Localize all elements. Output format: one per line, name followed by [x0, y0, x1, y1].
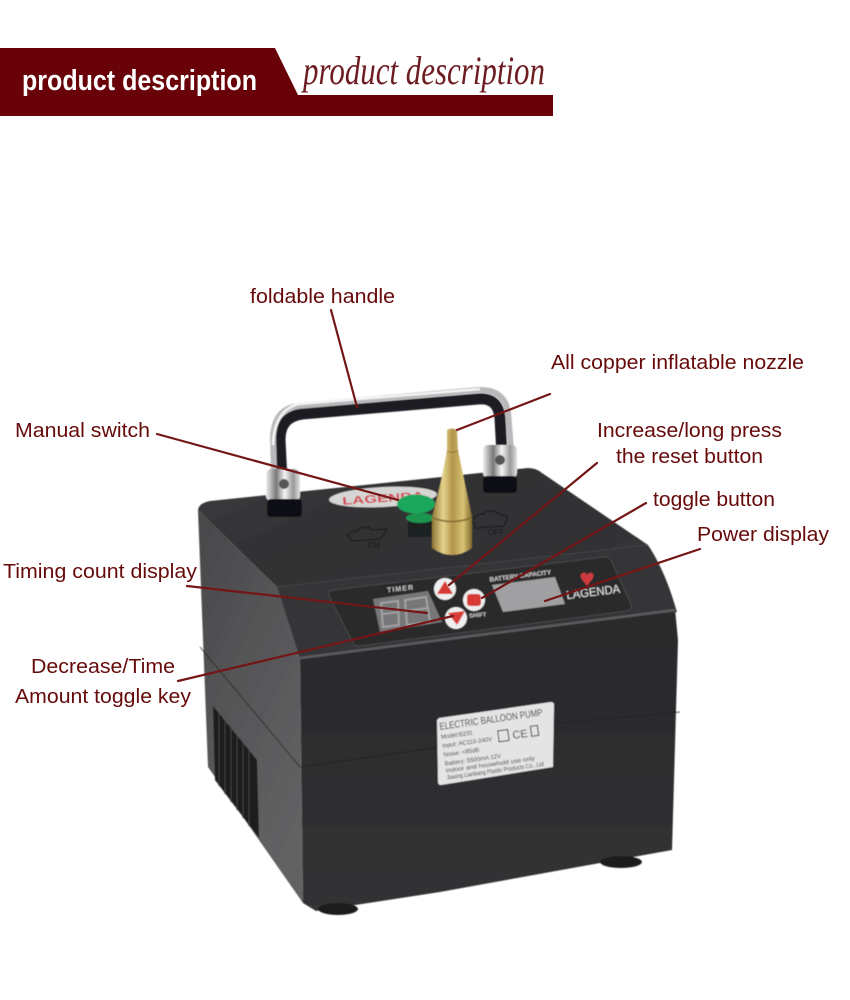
foldable handle	[273, 389, 511, 480]
logo heart	[581, 573, 593, 586]
label: timing count display: Timing count display	[3, 560, 198, 583]
banner heading: product description	[22, 65, 257, 97]
feet	[318, 856, 642, 915]
toggle button	[463, 589, 485, 611]
left hinge	[266, 469, 302, 517]
sticker title: ELECTRIC BALLOON PUMP	[439, 708, 544, 733]
label: increase/reset	[597, 419, 782, 468]
slanted control face	[277, 545, 677, 658]
top face	[198, 468, 648, 587]
header banner	[0, 48, 553, 116]
panel plate	[329, 557, 632, 646]
sticker specs: Noise: <85dB	[443, 748, 480, 759]
off battery icon: OFF	[488, 528, 504, 537]
label: decrease/time amount toggle: Decrease/Time	[31, 655, 175, 678]
label: foldable handle: foldable handle	[250, 285, 395, 308]
banner shape	[0, 48, 553, 116]
timer caption: TIMER	[387, 585, 413, 594]
product photo: balloon pump	[198, 389, 680, 915]
top badge	[329, 484, 437, 510]
battery display	[492, 577, 565, 612]
label: decrease/time amount toggle	[15, 655, 192, 708]
certification marks: CE	[512, 728, 529, 742]
body seams	[200, 647, 680, 767]
sticker specs: Jiaxing Lianbang Plastic Products Co., Ltd	[446, 762, 544, 781]
top badge: LAGENDA	[342, 490, 425, 508]
logo wordmark: LAGENDA	[566, 582, 621, 602]
product sticker	[437, 702, 554, 785]
label: increase/reset: the reset button	[616, 445, 763, 468]
front face	[300, 609, 678, 911]
on battery icon: ON	[368, 541, 380, 550]
label: decrease/time amount toggle: Amount toggle key	[15, 685, 192, 708]
sticker specs: Input: AC110-240V	[442, 737, 493, 750]
front top edge highlight	[300, 610, 675, 658]
right hinge	[483, 445, 517, 493]
callout lines	[157, 310, 700, 681]
label: toggle button: toggle button	[653, 488, 775, 511]
script heading: product description	[301, 48, 545, 93]
side vent	[213, 706, 259, 838]
brass nozzle	[432, 428, 472, 555]
label: increase/reset: Increase/long press	[597, 419, 782, 442]
shift caption: SHIFT	[469, 612, 487, 620]
label: nozzle: All copper inflatable nozzle	[551, 351, 804, 374]
label: power display: Power display	[697, 523, 830, 546]
green manual switch	[397, 494, 435, 537]
label: manual switch: Manual switch	[15, 419, 150, 442]
timer display	[373, 591, 442, 632]
battery capacity caption: BATTERY CAPACITY	[489, 569, 552, 584]
on battery icon	[347, 527, 387, 550]
left face	[198, 510, 303, 903]
sticker specs: Indoor and household use only	[445, 756, 535, 775]
increase button	[434, 578, 456, 600]
decrease button	[445, 607, 467, 629]
sticker specs	[441, 721, 544, 781]
control panel	[329, 557, 632, 646]
sticker specs: Battery: 5500mA 12V	[444, 754, 501, 768]
off battery icon	[472, 511, 508, 537]
sticker specs: Model:B231	[441, 730, 474, 741]
